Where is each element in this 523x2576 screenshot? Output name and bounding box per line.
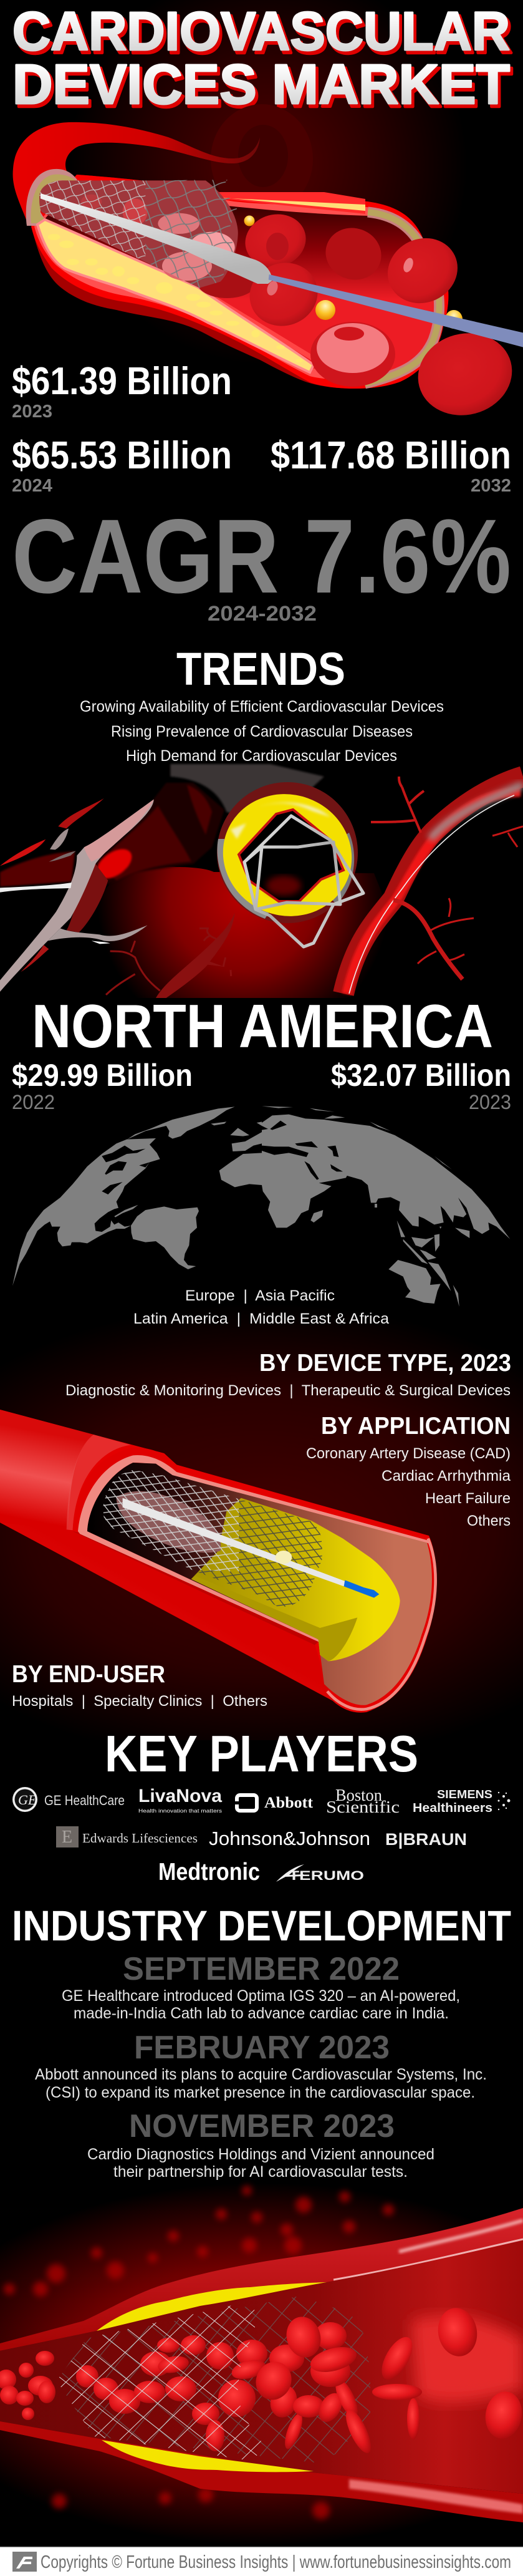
development: February 2023: FEBRUARY 2023 <box>134 2030 390 2066</box>
segment: by device type: Diagnostic & Monitoring Devices | Therapeutic & Surgical Devices <box>65 1382 511 1399</box>
regions list: Latin America | Middle East & Africa <box>133 1310 390 1327</box>
stat: 2024 market size: $65.53 Billion <box>12 434 232 477</box>
development: November 2023: Cardio Diagnostics Holdings and Vizient announced <box>87 2146 434 2163</box>
segment: by application: Others <box>467 1513 511 1529</box>
logo: LivaNova: LivaNova <box>138 1786 222 1806</box>
stat: 2024 market size <box>12 434 232 496</box>
stat: CAGR: 2024-2032 <box>208 602 317 626</box>
logo: Terumo: TERUMO <box>289 1869 364 1883</box>
segment: by application: Coronary Artery Disease (CAD) <box>306 1445 511 1462</box>
illustration: stent inside blood vessel <box>0 2183 523 2547</box>
logo: GE HealthCare: GE <box>18 1792 37 1808</box>
segment: by end-user: Hospitals | Specialty Clinics | Others <box>12 1693 267 1710</box>
logo: Terumo <box>276 1864 364 1883</box>
hero background glow <box>0 0 523 368</box>
illustration: artery tube with stent <box>0 1410 436 1713</box>
logo: Edwards Lifesciences <box>56 1826 198 1847</box>
development: September 2022 <box>62 1951 460 2022</box>
stat: north america 2022: $29.99 Billion <box>12 1058 193 1093</box>
stat: 2023 market size <box>12 360 232 422</box>
stat: 2023 market size: $61.39 Billion <box>12 360 232 403</box>
segment: by application: BY APPLICATION <box>321 1413 511 1440</box>
development: September 2022: made-in-India Cath lab to advance cardiac care in India. <box>74 2005 449 2022</box>
development: November 2023 <box>87 2108 434 2181</box>
title: DEVICES MARKET <box>12 54 510 116</box>
logo: LivaNova: Health innovation that matters <box>138 1808 222 1814</box>
trends list: Growing Availability of Efficient Cardiovascular Devices <box>80 698 444 715</box>
icon: Fortune Business Insights logo <box>12 2552 37 2572</box>
development: November 2023: NOVEMBER 2023 <box>129 2108 395 2144</box>
heading: trends: TRENDS <box>176 643 345 695</box>
segment: by device type <box>65 1350 511 1399</box>
stat: north america 2022: 2022 <box>12 1091 55 1113</box>
logo: Siemens Healthineers: Healthineers <box>413 1801 492 1815</box>
logo: Boston Scientific: Scientific <box>326 1798 400 1816</box>
segment: by end-user: BY END-USER <box>12 1661 165 1688</box>
illustration: heart valve and vessels <box>0 764 523 998</box>
logo: Johnson & Johnson: Johnson&Johnson <box>209 1828 370 1849</box>
regions list: Europe | Asia Pacific <box>185 1287 335 1304</box>
logo: Edwards Lifesciences: Edwards Lifesciences <box>82 1831 198 1846</box>
title: DEVICES MARKET <box>15 57 512 119</box>
stat: north america 2023: 2023 <box>469 1091 511 1113</box>
title: CARDIOVASCULAR <box>15 4 512 65</box>
logo: Medtronic: Medtronic <box>158 1859 260 1886</box>
segment: by application: Cardiac Arrhythmia <box>381 1468 511 1484</box>
trends list <box>80 698 444 765</box>
logo: GE HealthCare <box>12 1787 125 1812</box>
logo: B. Braun: B|BRAUN <box>385 1830 467 1849</box>
development: September 2022: GE Healthcare introduced Optima IGS 320 – an AI-powered, <box>62 1987 460 2005</box>
logo: Abbott <box>232 1794 314 1811</box>
trends list: High Demand for Cardiovascular Devices <box>126 747 397 765</box>
regions list <box>133 1287 390 1327</box>
title <box>12 1 512 119</box>
stat: 2032 market size <box>271 434 511 496</box>
logo: Edwards Lifesciences: E <box>62 1828 72 1847</box>
stat: north america 2022 <box>12 1058 193 1113</box>
segment: by application: Heart Failure <box>425 1490 511 1507</box>
mid section dark red background <box>0 1304 523 1740</box>
logo: GE HealthCare: GE HealthCare <box>44 1793 125 1808</box>
logo: Siemens Healthineers: SIEMENS <box>437 1788 492 1801</box>
stat: north america 2023 <box>331 1058 511 1113</box>
development: September 2022: SEPTEMBER 2022 <box>123 1951 400 1987</box>
trends list: Rising Prevalence of Cardiovascular Diseases <box>111 723 413 740</box>
development: November 2023: their partnership for AI cardiovascular tests. <box>113 2163 408 2181</box>
globe map <box>12 1106 510 1307</box>
stat: 2024 market size: 2024 <box>12 476 52 496</box>
development: February 2023: Abbott announced its plans to acquire Cardiovascular Systems, Inc. <box>35 2066 487 2083</box>
stat: 2032 market size: 2032 <box>471 476 511 496</box>
segment: by application <box>306 1413 511 1529</box>
development: February 2023: (CSI) to expand its market presence in the cardiovascular space. <box>46 2084 475 2101</box>
segment: by device type: BY DEVICE TYPE, 2023 <box>259 1350 511 1377</box>
title: CARDIOVASCULAR <box>12 1 510 62</box>
logo: Boston Scientific <box>326 1786 400 1816</box>
logo: Abbott: Abbott <box>264 1794 314 1811</box>
heading: key players: KEY PLAYERS <box>105 1725 418 1783</box>
footer bar <box>0 2547 523 2576</box>
segment: by end-user <box>12 1661 267 1710</box>
logo: Siemens Healthineers <box>413 1788 510 1815</box>
stat: 2023 market size: 2023 <box>12 402 52 422</box>
logo: Boston Scientific: Boston <box>335 1786 382 1804</box>
illustration: artery with stent and catheter <box>13 104 523 425</box>
development: February 2023 <box>35 2030 487 2101</box>
